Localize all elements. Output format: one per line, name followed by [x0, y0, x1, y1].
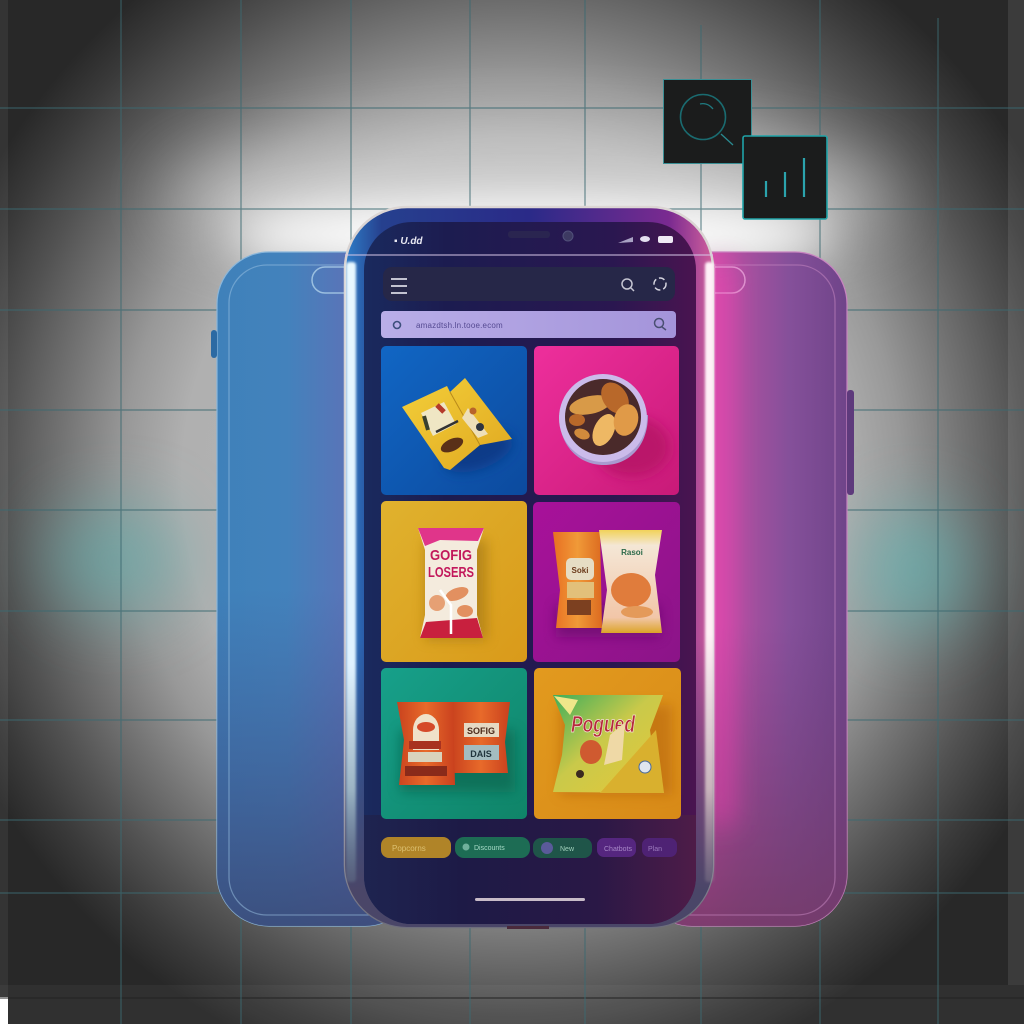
pill: plan: Plan [648, 846, 662, 853]
pill: new: New [560, 846, 575, 853]
tile: green with two red packs: SOFIG [467, 726, 495, 736]
app top bar [383, 267, 675, 301]
tile: pink with bowl of snacks [534, 346, 679, 495]
pill: discounts [455, 837, 530, 858]
pill: chatbots: Chatbots [604, 846, 633, 853]
status bar: ▪ U.dd [394, 236, 423, 247]
neon edge strips [345, 255, 714, 882]
pill: new [533, 838, 592, 858]
tile: green with two red packs [381, 668, 527, 819]
tile: purple with two packs: Soki [572, 566, 588, 575]
icon: magnifier tile [664, 80, 752, 164]
search bar: amazdtsh.ln.tooe.ecom [416, 321, 503, 330]
search bar [381, 311, 676, 338]
tile: blue with yellow pack [381, 346, 527, 495]
tile: purple with two packs: Rasoi [621, 548, 643, 557]
status bar [394, 231, 673, 247]
tile: green with two red packs: DAIS [470, 749, 492, 759]
pill: popcorns: Popcorns [392, 844, 426, 853]
pill: plan [642, 838, 677, 857]
tile: yellow with pink snack pack [381, 501, 527, 662]
icon: bar chart tile [743, 136, 827, 219]
pill: popcorns [381, 837, 451, 858]
category pills [381, 837, 677, 858]
tile: yellow with pink snack pack: LOSERS [428, 564, 474, 581]
back phone: blue left [211, 252, 419, 926]
back phone: magenta right [640, 252, 854, 926]
tile: orange with large chips pack [534, 668, 681, 819]
home indicator [475, 898, 585, 901]
pill: discounts: Discounts [474, 845, 505, 852]
phone screen [364, 222, 696, 924]
tile: purple with two packs [533, 502, 680, 662]
bottom port [507, 926, 549, 929]
main phone [345, 207, 734, 929]
tile: yellow with pink snack pack: GOFIG [430, 547, 472, 564]
pill: chatbots [597, 838, 636, 857]
phone body [345, 207, 713, 927]
tile: orange with large chips pack: Pogued [571, 711, 636, 737]
neon glow: right edge spill [708, 265, 734, 825]
